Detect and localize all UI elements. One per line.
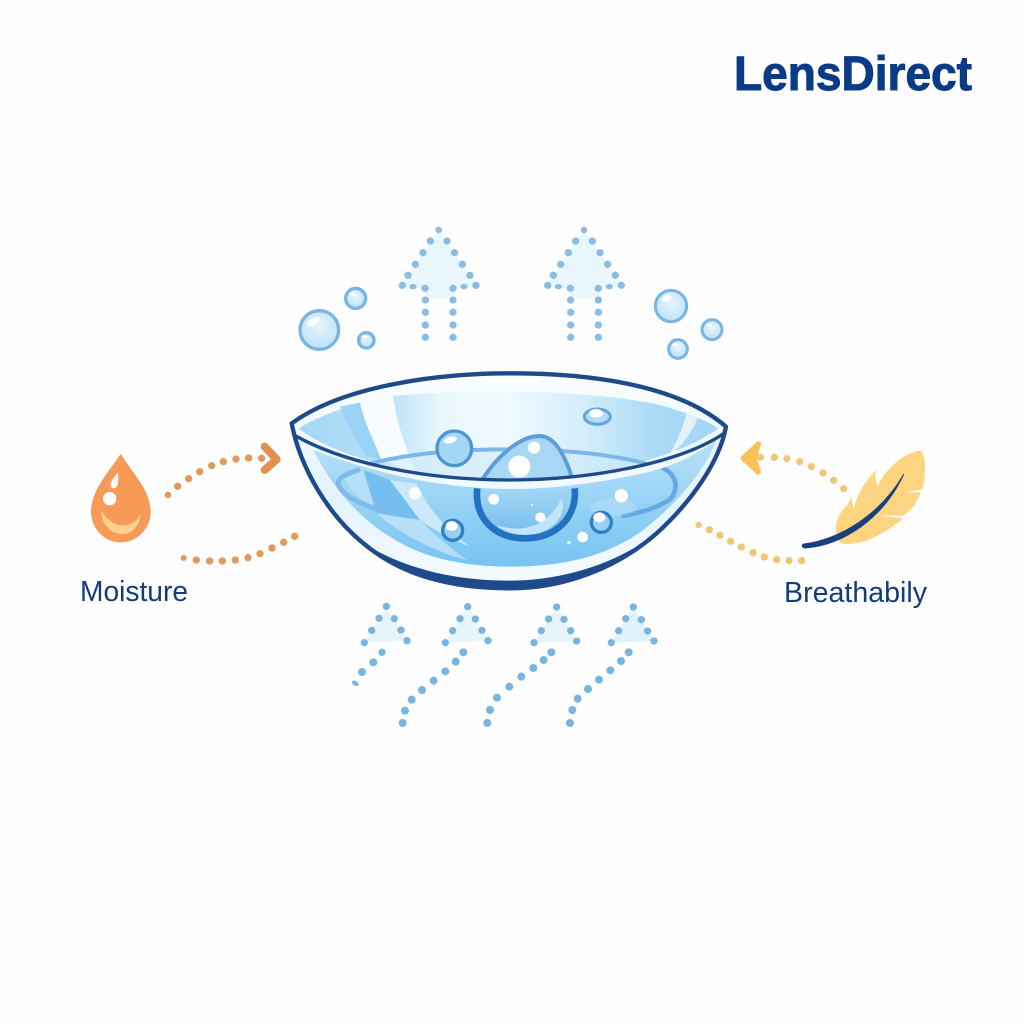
icon: orange water drop — [92, 455, 150, 542]
dotted path: moisture lower — [181, 533, 298, 564]
icon: feather — [802, 451, 925, 548]
contact lens bowl — [292, 373, 726, 588]
label: Breathabily: Breathabily — [784, 577, 927, 609]
back blue strip — [340, 403, 383, 459]
water ring back — [338, 449, 678, 519]
lens outline — [292, 373, 726, 588]
front water — [313, 440, 717, 567]
lens bottom thick edge — [363, 533, 657, 588]
arrow: bottom 2 — [399, 603, 491, 727]
arrow: top right upward — [544, 227, 625, 341]
white streak left — [360, 396, 417, 473]
white streak right — [668, 413, 698, 457]
rim front band — [300, 438, 718, 489]
top dotted arrows and bubbles — [300, 227, 722, 358]
logo: LensDirect: LensDirect — [734, 48, 972, 101]
arrow: bottom 3 — [484, 604, 580, 727]
arrow: moisture inward — [165, 447, 277, 498]
white specks — [409, 487, 628, 544]
lens front rim — [294, 433, 724, 480]
water ring front and reflections — [338, 468, 676, 560]
lens outer shell — [292, 373, 726, 588]
moisture group — [92, 447, 298, 564]
bubbles: right cluster — [655, 290, 722, 358]
dotted path: breathability lower — [696, 522, 805, 564]
bottom dotted arrows — [351, 603, 657, 727]
bubbles: left cluster — [300, 288, 374, 349]
arrow: bottom 4 — [566, 604, 657, 727]
water drop — [477, 436, 575, 538]
breathability group — [696, 444, 925, 564]
label: Moisture: Moisture — [80, 576, 188, 608]
lens back interior — [298, 391, 718, 480]
arrow: top left upward — [399, 227, 479, 341]
bubbles in lens — [437, 409, 611, 540]
arrow: bottom 1 — [351, 603, 410, 687]
arrow: breathability inward — [743, 444, 847, 492]
